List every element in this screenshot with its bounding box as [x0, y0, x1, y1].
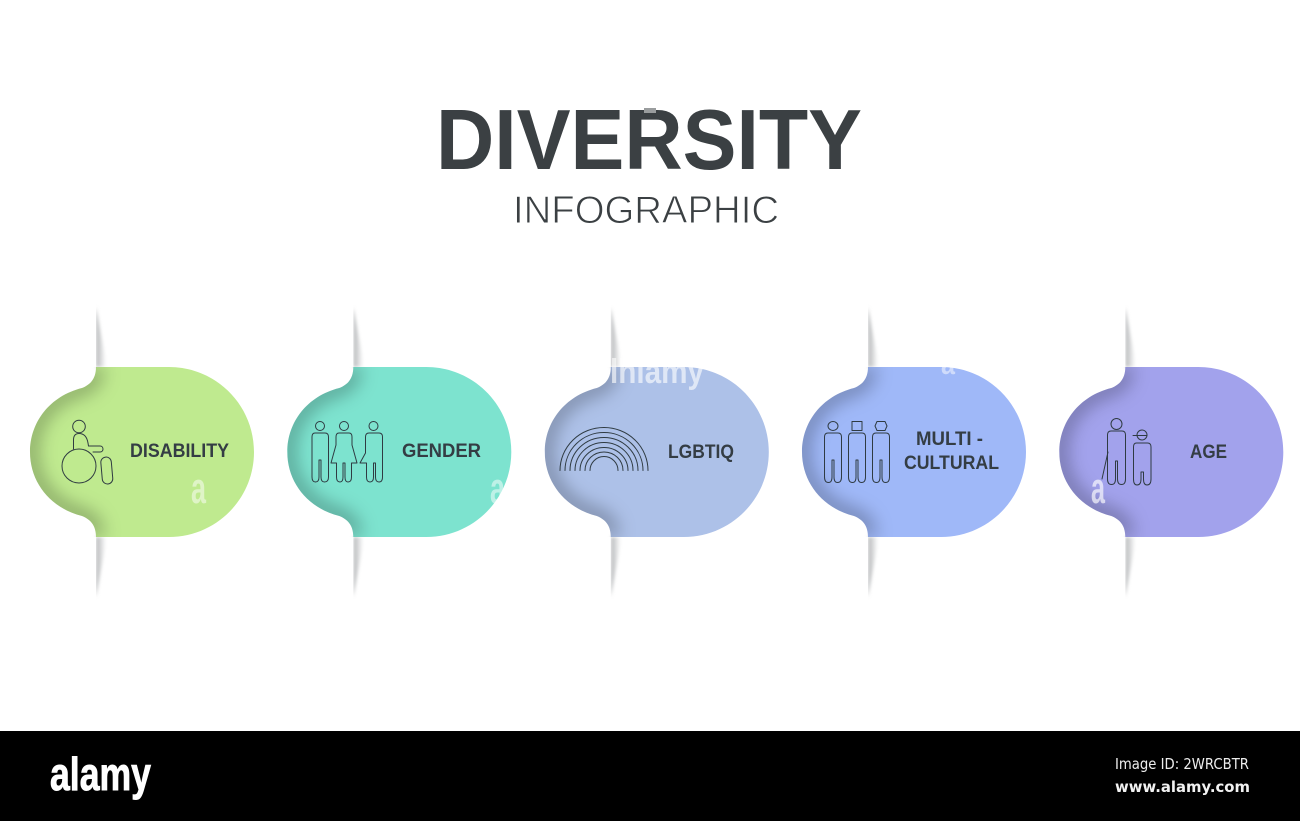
label: gender: GENDER: [402, 441, 481, 462]
panel: disability: [30, 300, 254, 604]
footer bar: [0, 731, 1300, 821]
website: www.alamy.com: [1115, 778, 1250, 796]
watermark fragment: a: [490, 464, 505, 513]
watermark fragment: lhiamy: [610, 353, 704, 391]
panel: multicultural: [802, 300, 1026, 604]
icon: three figures: [824, 422, 890, 482]
label: disability: DISABILITY: [130, 441, 229, 462]
watermark fragment: a: [941, 348, 955, 381]
label: multicultural: [904, 429, 999, 474]
subtitle: INFOGRAPHIC: [513, 189, 779, 232]
icon: gender figures: [312, 422, 382, 482]
label: multicultural: CULTURAL: [904, 453, 999, 474]
watermark fragment on title: [644, 108, 656, 113]
title: DIVERSITY: [436, 93, 862, 188]
icon: wheelchair user: [62, 420, 113, 484]
icon: rainbow: [560, 428, 648, 470]
watermark fragment: a: [191, 464, 206, 513]
icon: adult and child: [1102, 418, 1151, 485]
label: multicultural: MULTI -: [916, 429, 983, 450]
alamy logo: alamy: [50, 748, 151, 800]
label: lgbtiq: LGBTIQ: [668, 442, 734, 463]
label: age: AGE: [1190, 442, 1227, 463]
panel: age: [1059, 300, 1283, 604]
panel: lgbtiq: [545, 300, 769, 604]
panel: gender: [287, 300, 511, 604]
image id: Image ID: 2WRCBTR: [1115, 755, 1249, 773]
watermark fragment: a: [1091, 464, 1105, 513]
